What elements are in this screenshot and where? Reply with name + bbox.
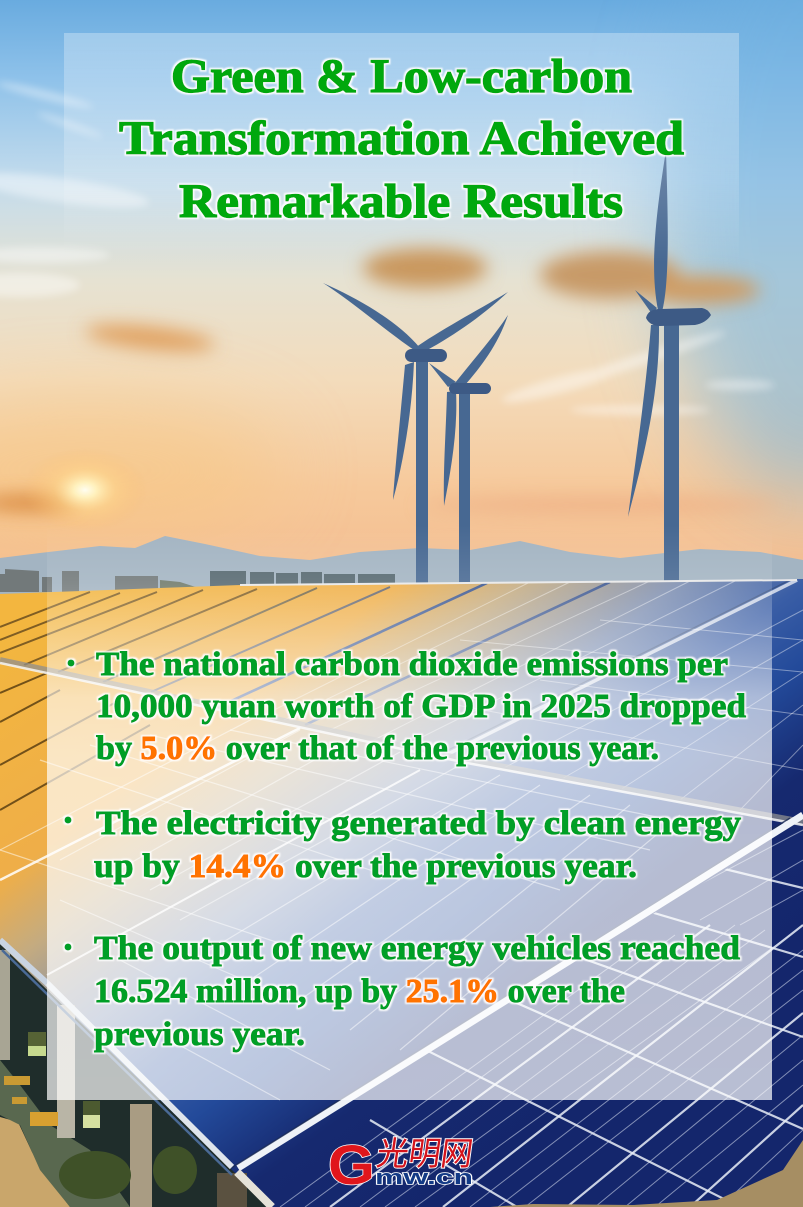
sandy ground bottom right — [490, 1140, 803, 1207]
bullet point: carbon dioxide emissions: by 5.0% over that of the previous year. — [96, 730, 659, 767]
sun — [23, 448, 147, 532]
logo: Guangming Online: 光明网 — [374, 1136, 475, 1173]
logo: Guangming Online: G — [328, 1133, 375, 1196]
wind turbine middle — [429, 315, 508, 583]
title: Green & Low-carbon — [171, 50, 632, 103]
upper panel row lines — [0, 580, 803, 810]
title: Transformation Achieved — [119, 112, 684, 165]
sky background — [0, 0, 803, 610]
title: Remarkable Results — [179, 175, 623, 228]
wind turbine left — [323, 283, 508, 583]
bullet point: carbon dioxide emissions: The national carbon dioxide emissions per — [96, 646, 728, 683]
bullet point: new energy vehicles: previous year. — [94, 1016, 305, 1053]
bullet point: new energy vehicles — [65, 930, 740, 1053]
bullet point: clean energy electricity: The electricity generated by clean energy — [96, 805, 741, 842]
middle panel row lines — [0, 673, 720, 1100]
logo: Guangming Online: mw.cn — [375, 1167, 473, 1189]
panel frame bands — [0, 660, 803, 1170]
solar panel array — [0, 579, 803, 1207]
bullet point: new energy vehicles: 16.524 million, up by 25.1% over the — [94, 973, 625, 1010]
city skyline — [0, 569, 395, 592]
wind turbine right — [628, 150, 711, 581]
mountains — [0, 536, 803, 596]
building below the panels — [0, 940, 272, 1207]
bullet point: carbon dioxide emissions — [68, 646, 746, 767]
bullet point: carbon dioxide emissions: 10,000 yuan worth of GDP in 2025 dropped — [96, 688, 746, 725]
bullet point: new energy vehicles: The output of new energy vehicles reached — [94, 930, 740, 967]
title — [119, 50, 684, 228]
translucent panel behind the bullet list — [47, 525, 772, 1100]
clouds — [0, 79, 780, 512]
bullet point: clean energy electricity — [65, 805, 741, 885]
translucent panel behind the title — [64, 33, 739, 263]
bullet point: clean energy electricity: up by 14.4% over the previous year. — [94, 848, 637, 885]
lower panel grid lines — [280, 830, 803, 1207]
logo: Guangming Online — [328, 1133, 475, 1196]
